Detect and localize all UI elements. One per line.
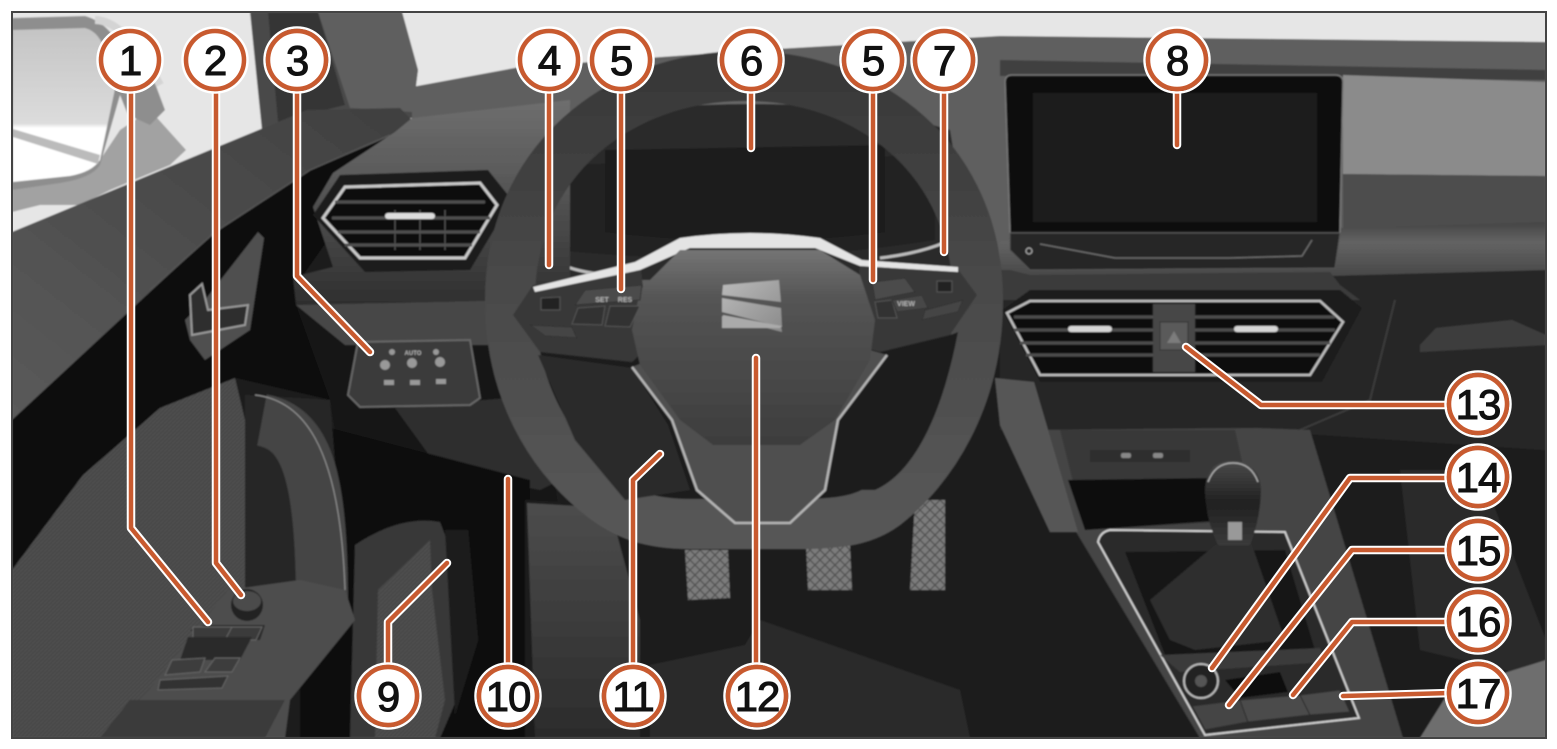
door fabric panel (12, 378, 245, 738)
seat left of console (985, 430, 1200, 738)
callout 4 (516, 28, 582, 265)
left spoke (514, 271, 643, 362)
black door band (12, 130, 405, 570)
callout 11 (600, 454, 666, 728)
dashboard top band (412, 36, 1546, 300)
callout 6: 6 (740, 37, 762, 84)
airbag hub (632, 250, 875, 445)
callout 8: 8 (1166, 37, 1188, 84)
mirror adjuster knob (231, 589, 263, 621)
carpet right (1313, 435, 1545, 480)
lower dash right (1000, 270, 1545, 450)
callout 1: 1 (119, 37, 141, 84)
callout 2: 2 (204, 37, 226, 84)
dash fill under screen (975, 270, 1360, 300)
callout 9: 9 (377, 673, 399, 720)
door pull handle (245, 395, 345, 610)
callout 14 (1212, 444, 1510, 668)
callout 14: 14 (1456, 454, 1501, 501)
callout 9 (356, 563, 447, 728)
gear surround (1098, 530, 1359, 735)
callout 16: 16 (1456, 598, 1500, 645)
callout 17: 17 (1456, 670, 1500, 717)
windscreen pillars (250, 12, 418, 130)
central air vents with hazard button (1002, 290, 1362, 382)
callout 10: 10 (486, 673, 530, 720)
callout 5 right: 5 (862, 37, 884, 84)
right spoke buttons (872, 278, 915, 300)
console body (1030, 428, 1403, 738)
callout 11: 11 (612, 673, 654, 720)
callout 4: 4 (538, 37, 561, 84)
callout 5 left (588, 28, 654, 289)
door upper panel (12, 108, 412, 420)
callout 8 (1144, 28, 1210, 145)
infotainment screen (1005, 75, 1343, 270)
parking buttons (1192, 700, 1248, 730)
gear knob (1205, 461, 1261, 545)
rim (510, 76, 978, 524)
callout 7: 7 (933, 37, 955, 84)
callout 1 (98, 28, 208, 622)
callout 5 left: 5 (610, 37, 632, 84)
sky through windscreen (12, 12, 1546, 242)
callout 3: 3 (286, 37, 308, 84)
top dash vent slats (442, 104, 546, 136)
callout 12: 12 (735, 673, 779, 720)
steering wheel: SET (595, 297, 610, 304)
instrument cluster hood (569, 104, 953, 280)
callout 5 right (840, 28, 906, 280)
callout 3 (264, 28, 370, 352)
chrome top strip (533, 233, 958, 292)
wood trim right (1000, 226, 1545, 276)
callout 16 (1293, 588, 1510, 695)
logo (722, 280, 782, 332)
exterior mirror (12, 16, 186, 212)
left spoke buttons (541, 297, 560, 310)
callout 2 (182, 28, 248, 595)
lower dash left (296, 307, 530, 500)
lower spoke (632, 350, 887, 525)
window switch panel (100, 580, 355, 738)
start button (1184, 664, 1218, 698)
callout 6 (718, 28, 784, 148)
centre console (985, 378, 1546, 738)
door handle recess (185, 232, 264, 360)
steering wheel (510, 76, 978, 525)
steering wheel: VIEW (897, 301, 915, 308)
floor and pedals (525, 500, 1000, 738)
callout 15: 15 (1456, 527, 1500, 574)
callout 12 (724, 358, 790, 728)
callout 13 (1186, 347, 1510, 436)
callout 7 (912, 28, 976, 252)
callout 13: 13 (1456, 381, 1500, 428)
light switch panel: AUTO (405, 351, 422, 357)
right spoke (855, 262, 977, 352)
callout 15 (1229, 518, 1510, 705)
hazard button (1153, 304, 1195, 372)
footwell (300, 420, 530, 738)
callout 17 (1343, 660, 1510, 726)
lower spoke openings (538, 355, 690, 500)
left dash surface (293, 100, 570, 305)
left air vent (313, 170, 512, 272)
callout 10 (476, 479, 540, 728)
light switch panel (348, 340, 480, 407)
steering wheel: RES (618, 297, 633, 304)
dash textured right panel (1343, 75, 1546, 176)
